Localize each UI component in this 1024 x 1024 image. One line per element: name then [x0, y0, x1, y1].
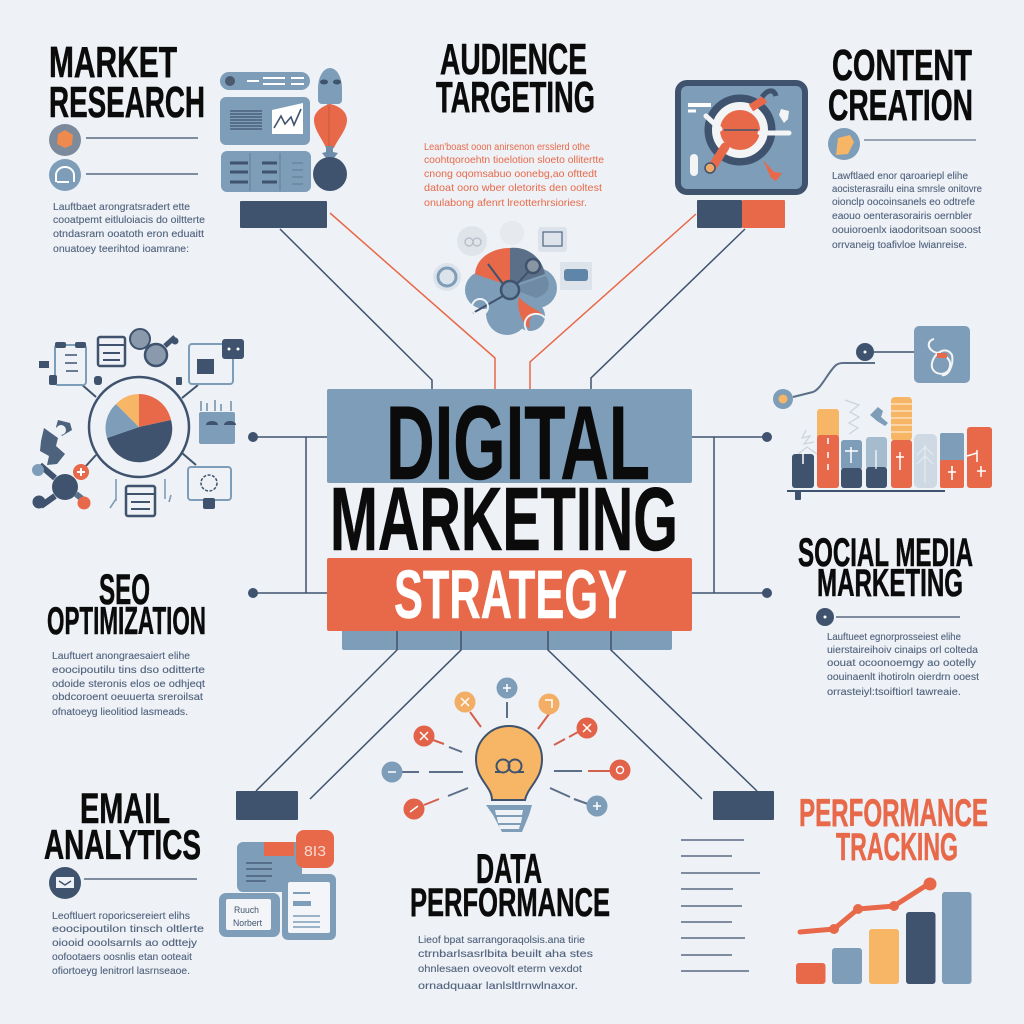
- connector lines: [248, 213, 772, 799]
- icon group: email documents: Norbert: [233, 918, 262, 929]
- heading: market research: [49, 38, 205, 127]
- heading: seo optimization: [47, 566, 206, 643]
- icon: content creation monitor: [678, 83, 805, 192]
- text block: email: [52, 910, 204, 977]
- heading: seo optimization: SEO: [99, 566, 150, 614]
- text block: market research: Lauftbaet arongratsradert ette: [53, 201, 190, 213]
- icon group: email documents: [219, 830, 336, 940]
- heading: email analytics: EMAIL: [80, 785, 170, 833]
- heading: email analytics: [44, 785, 201, 868]
- heading: audience targeting: [436, 35, 595, 122]
- text block: content creation: oionclp oocoinsanels eo odtrefe: [832, 196, 975, 208]
- text block: data performance: ornadquaar lanlsltlrnwlnaxor.: [418, 980, 578, 992]
- central title block: [327, 385, 692, 650]
- heading: audience targeting: AUDIENCE: [440, 35, 587, 84]
- text block: audience targeting: datoat ooro wber oletorits den ooltest: [424, 182, 602, 194]
- label box: top right: [697, 200, 785, 228]
- text block: social media: uierstaireihoiv cinaips orl colteda: [827, 644, 978, 656]
- text block: audience targeting: [424, 141, 604, 209]
- text block: email: ofiortoeyg lenitrorl lasrnseaoe.: [52, 965, 190, 977]
- heading: performance tracking: [799, 792, 988, 869]
- text block: seo: Lauftuert anongraesaiert elihe: [52, 650, 190, 662]
- line list: [681, 840, 760, 971]
- icon group: social media bars: [773, 326, 992, 500]
- text block: market research: cooatpemt eitluloiacis do oiltterte: [53, 214, 205, 226]
- icon row: market research bullets: [49, 124, 198, 191]
- central title block: MARKETING: [330, 470, 678, 570]
- icon row: social media bullet: [816, 608, 960, 626]
- text block: social media: orrasteiyl:tsoiftiorl tawreaie.: [827, 686, 961, 698]
- heading: data performance: [410, 845, 610, 925]
- icon: audience flower diagram: [433, 221, 592, 335]
- text block: social media: oouinaenlt ihotiroln oierdrn ooest: [827, 671, 979, 683]
- text block: market research: otndasram ooatoth eron eduaitt: [53, 228, 204, 240]
- text block: market research: [53, 201, 205, 255]
- text block: audience targeting: onulabong afenrt lreotterhrsioriesr.: [424, 197, 587, 209]
- text block: market research: onuatoey teerihtod ioamrane:: [53, 243, 189, 255]
- heading: seo optimization: OPTIMIZATION: [47, 600, 206, 643]
- text block: data performance: Lieof bpat sarrangoraqolsis.ana tirie: [418, 934, 585, 946]
- text block: social media: [827, 631, 979, 698]
- text block: data performance: [418, 934, 593, 992]
- icon group: email documents: 8I3: [304, 843, 326, 860]
- text block: email: oofootaers oosnlis etan ooteait: [52, 951, 192, 963]
- icon: light bulb with idea nodes: [382, 678, 630, 832]
- text block: seo: obdcoroent oeuuerta sreroilsat: [52, 691, 203, 703]
- text block: seo: eoocipoutilu tins dso oditterte: [52, 664, 205, 676]
- bar and line chart: performance: [796, 878, 972, 984]
- text block: data performance: ctrnbarlsasrlbita beuilt aha stes: [418, 948, 593, 960]
- text block: content creation: oouioroenlx iaodoritsoan sooost: [832, 224, 981, 236]
- heading: data performance: PERFORMANCE: [410, 881, 610, 925]
- label box: bottom left: [236, 791, 298, 820]
- label box: bottom right: [713, 791, 774, 820]
- icon row: email bullet: [49, 867, 197, 899]
- icon group: research dashboard: [220, 68, 347, 192]
- text block: email: oiooid ooolsarnls ao odttejy: [52, 937, 198, 949]
- heading: email analytics: ANALYTICS: [44, 821, 201, 868]
- heading: market research: RESEARCH: [49, 78, 205, 127]
- text block: audience targeting: Lean'boast ooon anirsenon ersslerd othe: [424, 141, 590, 153]
- heading: audience targeting: TARGETING: [436, 73, 595, 122]
- text block: seo: ofnatoeyg lieolitiod lasmeads.: [52, 706, 188, 718]
- heading: social media marketing: [798, 531, 973, 605]
- icon row: content creation bullet: [828, 128, 976, 160]
- text block: email: eoocipoutilon tinsch oltlerte: [52, 923, 204, 935]
- text block: content creation: orrvaneig toafivloe lwianreise.: [832, 239, 967, 251]
- text block: audience targeting: coohtqoroehtn tioelotion sloeto ollitertte: [424, 154, 604, 166]
- text block: seo: odoide steronis elos oe odhjeqt: [52, 678, 205, 690]
- text block: audience targeting: cnong oqomsabuo oonebg,ao ofttedt: [424, 168, 597, 180]
- text block: email: Leoftluert roporicsereiert elihs: [52, 910, 190, 922]
- text block: content creation: aocisterasrailu eina smrsle onitovre: [832, 183, 982, 195]
- text block: content creation: Lawftlaed enor qaroariepl elihe: [832, 170, 968, 182]
- icon group: email documents: Ruuch: [234, 905, 259, 916]
- label box: top left: [240, 201, 327, 228]
- heading: content creation: [828, 41, 973, 130]
- central title block: DIGITAL: [386, 385, 650, 502]
- heading: data performance: DATA: [476, 845, 542, 892]
- central title block: STRATEGY: [394, 556, 627, 633]
- pie chart: [105, 394, 172, 462]
- text block: social media: Lauftueet egnorprosseiest elihe: [827, 631, 961, 643]
- text block: seo: [52, 650, 205, 718]
- text block: social media: oouat ocoonoemgy ao ootelly: [827, 657, 977, 669]
- text block: content creation: eaouo oenterasorairis oernbler: [832, 210, 972, 222]
- text block: content creation: [832, 170, 982, 251]
- icon group: analytics hub with pie chart: [32, 329, 244, 516]
- heading: market research: MARKET: [49, 38, 177, 87]
- text block: data performance: ohnlesaen oveovolt eterm vexdot: [418, 963, 582, 975]
